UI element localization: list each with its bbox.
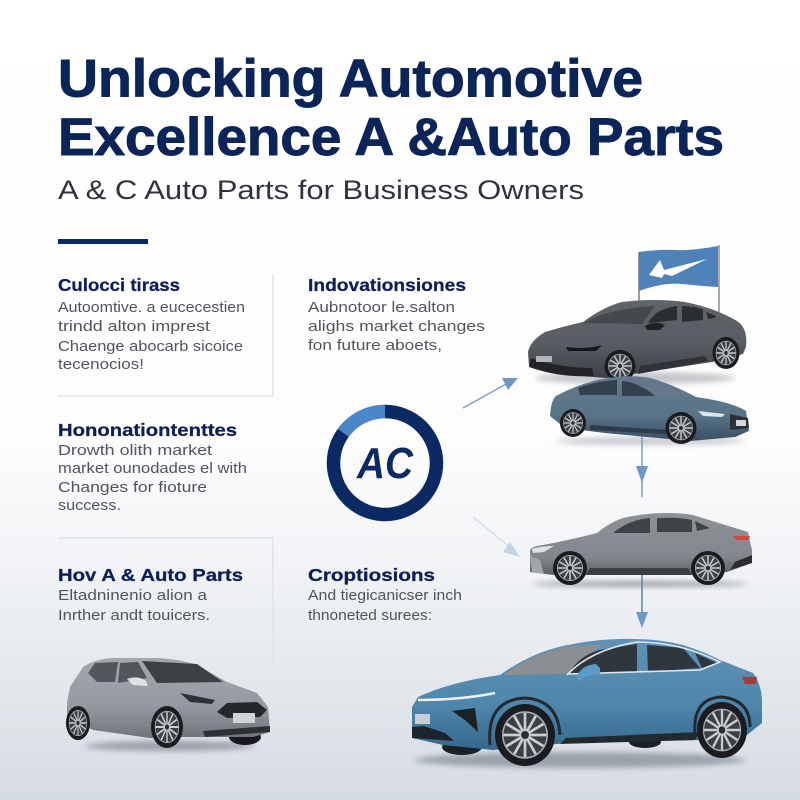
body text: croptiosions: thnoneted surees: [308, 607, 432, 624]
car: dark grey sedan [528, 300, 746, 384]
car: silver hatchback [66, 658, 270, 751]
body text: indovationsiones: alighs market changes [308, 318, 485, 335]
arrow: blue sedan to grey sedan [636, 436, 648, 497]
heading: croptiosions: Croptiosions [308, 565, 435, 585]
body text: indovationsiones: fon future aboets, [308, 337, 442, 354]
panel: how a and auto parts [58, 538, 273, 668]
body text: hononationtenttes: Drowth olith market [58, 442, 213, 459]
body text: culocci tirass: tecenocios! [58, 356, 144, 373]
body text: indovationsiones: Aubnotoor le.salton [308, 299, 455, 316]
panel: culocci tirass [58, 275, 273, 396]
heading: indovationsiones: Indovationsiones [308, 275, 466, 295]
panel: indovationsiones [308, 275, 485, 354]
title [58, 50, 724, 167]
body text: croptiosions: And tiegicanicser inch [308, 587, 462, 604]
heading: how a and auto parts: Hov A & Auto Parts [58, 565, 243, 585]
body text: hononationtenttes: success. [58, 497, 121, 514]
heading: hononationtenttes: Hononationtenttes [58, 420, 237, 440]
body text: hononationtenttes: market ounodades el with [58, 460, 247, 477]
icon: flag [639, 245, 719, 312]
body text: how a and auto parts [58, 587, 210, 624]
heading: culocci tirass: Culocci tirass [58, 275, 180, 295]
arrow: grey sedan to blue crossover [636, 575, 648, 628]
subtitle: A & C Auto Parts for Business Owners [58, 175, 584, 205]
car: grey sedan [530, 513, 752, 586]
body text: croptiosions [308, 587, 462, 624]
panel: hononationtenttes [58, 420, 247, 514]
arrow: logo to dark sedan [463, 378, 518, 408]
icon: AC ring logo: AC [356, 439, 414, 488]
title rule [58, 239, 148, 244]
body text: culocci tirass: trindd alton imprest [58, 318, 211, 335]
title: Excellence A &Auto Parts [58, 108, 724, 167]
body text: how a and auto parts: Inrther andt touicers. [58, 607, 210, 624]
title: Unlocking Automotive [58, 50, 643, 108]
body text: hononationtenttes: Changes for fioture [58, 479, 207, 496]
arrow: logo to grey sedan [473, 517, 520, 557]
body text: indovationsiones [308, 299, 485, 354]
body text: how a and auto parts: Eltadninenio alion a [58, 587, 208, 604]
panel: croptiosions [308, 565, 462, 624]
icon: AC ring logo [334, 412, 436, 514]
body text: culocci tirass: Autoomtive. a eucecestien [58, 299, 245, 316]
body text: hononationtenttes [58, 442, 247, 514]
car: blue crossover [412, 639, 762, 768]
car: slate blue sedan [550, 376, 749, 445]
body text: culocci tirass: Chaenge abocarb sicoice [58, 338, 243, 355]
body text: culocci tirass [58, 299, 245, 373]
